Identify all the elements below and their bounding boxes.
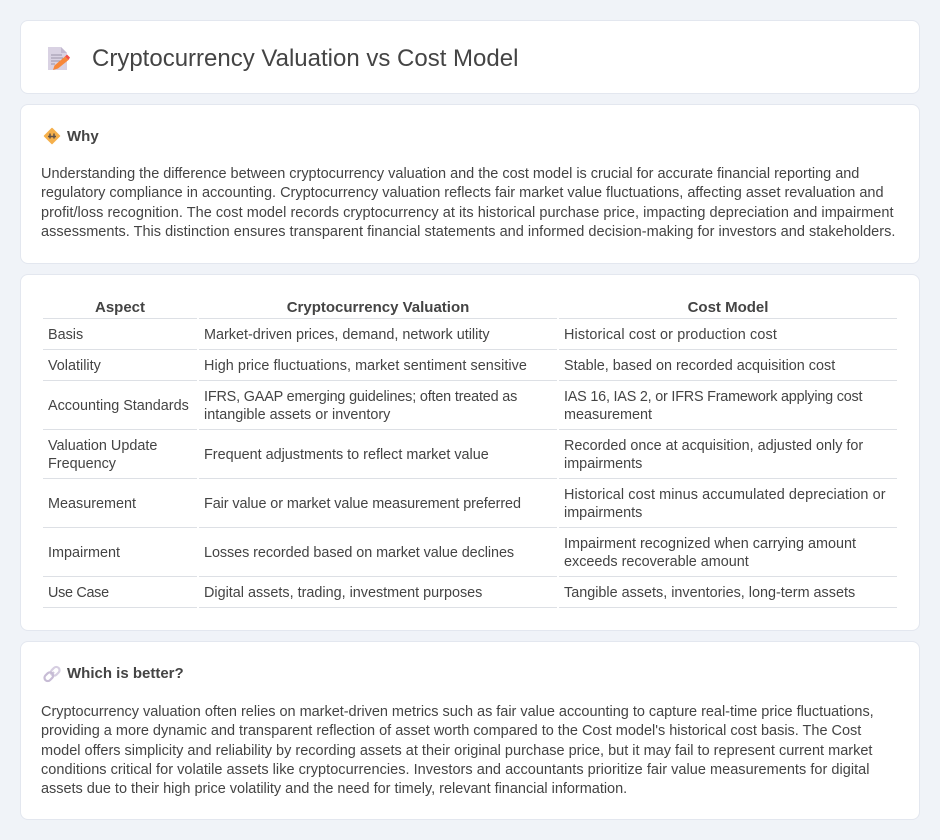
- table: comparison: IFRS, GAAP emerging guidelines; often treated as: [204, 389, 517, 405]
- text block: which is better paragraph: [41, 704, 874, 797]
- table: comparison: Measurement: [48, 496, 136, 512]
- table: comparison: impairments: [564, 456, 642, 472]
- table: comparison: IAS 16, IAS 2, or IFRS Framework applying cost: [564, 389, 862, 405]
- table: comparison: Aspect: [95, 299, 145, 316]
- table: comparison: Use Case: [48, 585, 109, 601]
- text block: why paragraph: Understanding the difference between cryptocurrency valuation and the cost model is crucial for accurate financial reporting and: [41, 166, 859, 182]
- table: comparison: Volatility: [48, 358, 101, 374]
- text block: which is better paragraph: model offers simplicity and reliability by recording assets at their original purchase price, but it may fail to represent current market: [41, 742, 872, 758]
- title: Cryptocurrency Valuation vs Cost Model: [92, 45, 518, 72]
- panel: why: [20, 104, 920, 264]
- table: comparison: Historical cost minus accumulated depreciation or: [564, 487, 886, 503]
- table: comparison: [43, 299, 897, 608]
- table: comparison: Impairment recognized when carrying amount: [564, 536, 856, 552]
- table: comparison: Digital assets, trading, investment purposes: [204, 585, 482, 601]
- table: comparison: Impairment: [48, 545, 120, 561]
- icon: link: [43, 666, 61, 682]
- text block: why paragraph: [41, 166, 895, 240]
- heading: why: Why: [67, 128, 99, 145]
- text block: why paragraph: profit/loss recognition. The cost model records cryptocurrency at its historical purchase price, impacting depreciation and impairment: [41, 204, 894, 220]
- table: comparison: Tangible assets, inventories, long-term assets: [564, 585, 855, 601]
- table: comparison: Frequency: [48, 456, 116, 472]
- table: comparison: measurement: [564, 407, 652, 423]
- panel: which is better: [20, 641, 920, 820]
- table: comparison: Losses recorded based on market value declines: [204, 545, 514, 561]
- table: comparison: Historical cost or production cost: [564, 327, 777, 343]
- text block: why paragraph: regulatory compliance in accounting. Cryptocurrency valuation reflects fair market value fluctuations, affecting asset revaluation and: [41, 185, 884, 201]
- panel: comparison: [20, 274, 920, 631]
- table: comparison: Market-driven prices, demand, network utility: [204, 327, 490, 343]
- text block: which is better paragraph: conditions critical for volatile assets like cryptocurrencies. Investors and accountants prioritize fair value measurements for digital: [41, 762, 870, 778]
- table: comparison: Frequent adjustments to reflect market value: [204, 447, 489, 463]
- text block: which is better paragraph: providing a more dynamic and transparent reflection of asset worth compared to the Cost model's historical cost basis. The Cost: [41, 723, 861, 739]
- table: comparison: Recorded once at acquisition, adjusted only for: [564, 438, 863, 454]
- icon: orange diamond: [44, 128, 60, 144]
- table: comparison: intangible assets or inventory: [204, 407, 390, 423]
- table: comparison: impairments: [564, 505, 642, 521]
- table: comparison: exceeds recoverable amount: [564, 554, 749, 570]
- table: comparison: Cost Model: [688, 299, 768, 316]
- text block: why paragraph: assessments. This distinction ensures transparent financial statements and informed decision-making for investors and stakeholders.: [41, 224, 895, 240]
- table: comparison: High price fluctuations, market sentiment sensitive: [204, 358, 527, 374]
- text block: which is better paragraph: assets due to their high price volatility and the need for timely, relevant financial information.: [41, 781, 627, 797]
- table: comparison: Fair value or market value measurement preferred: [204, 496, 521, 512]
- table: comparison: Accounting Standards: [48, 398, 189, 414]
- heading: which is better: Which is better?: [67, 665, 184, 682]
- table: comparison: Valuation Update: [48, 438, 157, 454]
- table: comparison: Stable, based on recorded acquisition cost: [564, 358, 835, 374]
- text block: which is better paragraph: Cryptocurrency valuation often relies on market-driven metrics such as fair value accounting to capture real-time price fluctuations,: [41, 704, 874, 720]
- panel: title header: [20, 20, 920, 94]
- table: comparison: Basis: [48, 327, 83, 343]
- table: comparison: Cryptocurrency Valuation: [287, 299, 469, 316]
- icon: document with pencil: [48, 47, 70, 70]
